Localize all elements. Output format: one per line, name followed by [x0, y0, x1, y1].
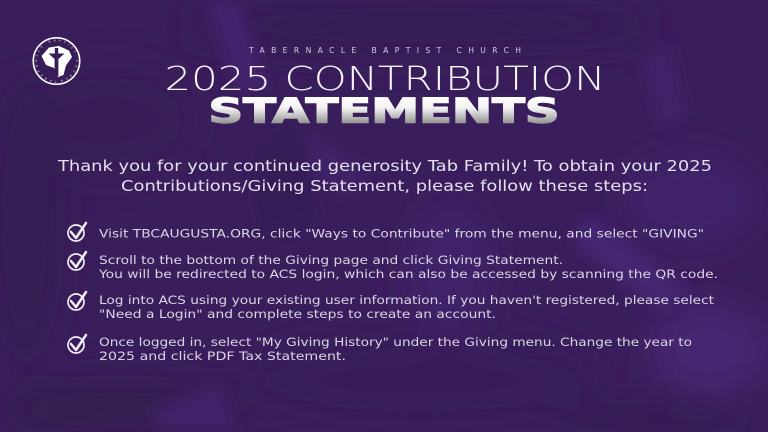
icon: check 1	[68, 223, 86, 241]
step 4	[68, 335, 692, 363]
logo: church seal: TABERNACLE BAPTIST CHURCH	[34, 39, 78, 83]
step 3: "Need a Login" and complete steps to create an account.	[99, 307, 496, 321]
intro text: Thank you for your continued generosity Tab Family! To obtain your 2025	[57, 157, 712, 175]
intro text: Contributions/Giving Statement, please follow these steps:	[121, 177, 648, 195]
step 2	[68, 252, 718, 281]
step 1	[68, 223, 704, 241]
icon: check 3	[68, 292, 86, 310]
icon: check 4	[68, 335, 86, 353]
title: 2025 contribution: 2025 CONTRIBUTION	[164, 60, 606, 98]
title: statements: STATEMENTS	[208, 92, 560, 132]
eyebrow: church name: TABERNACLE BAPTIST CHURCH	[248, 46, 521, 55]
step 3: Log into ACS using your existing user information. If you haven't registered, please select	[99, 293, 715, 307]
step 3	[68, 292, 715, 321]
intro text	[57, 157, 712, 195]
step 2: You will be redirected to ACS login, which can also be accessed by scanning the QR code.	[98, 267, 718, 281]
step 4: 2025 and click PDF Tax Statement.	[99, 349, 346, 363]
step 2: Scroll to the bottom of the Giving page and click Giving Statement.	[99, 253, 563, 267]
step 4: Once logged in, select "My Giving History" under the Giving menu. Change the year to	[99, 335, 692, 349]
icon: check 2	[68, 252, 86, 270]
step 1: Visit TBCAUGUSTA.ORG, click "Ways to Contribute" from the menu, and select "GIVING"	[99, 226, 704, 240]
